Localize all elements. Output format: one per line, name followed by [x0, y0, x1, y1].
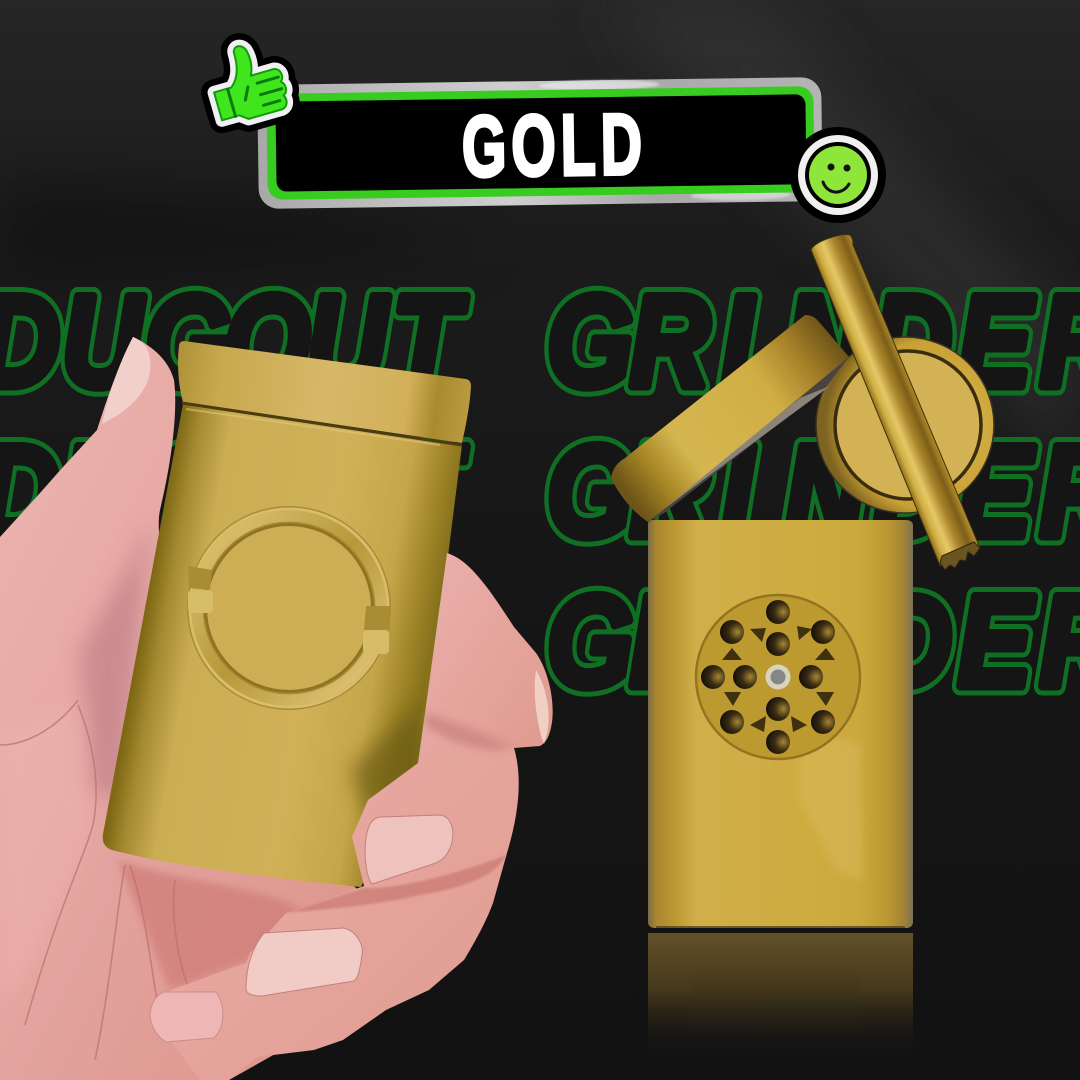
grinder teeth and holes	[696, 595, 860, 759]
nail: ring finger	[246, 928, 362, 996]
fingers over case	[150, 553, 553, 1080]
product photo: hand holding closed gold case	[0, 337, 553, 1080]
open lid	[611, 315, 849, 522]
banner title text: GOLD	[461, 97, 648, 195]
title banner	[257, 77, 823, 209]
recessed ring	[187, 506, 391, 710]
product photo: open gold grinder case	[611, 234, 994, 1058]
background word: GRINDER repeated	[547, 269, 1080, 714]
case lid	[178, 341, 471, 443]
icon: smiley	[790, 127, 886, 223]
round grinder disc	[816, 337, 994, 513]
closed case body	[103, 341, 471, 887]
nail: middle finger	[365, 815, 453, 884]
reflection	[648, 933, 913, 1058]
hand palm and thumb	[0, 337, 370, 1080]
pipe	[811, 234, 980, 570]
case body	[648, 520, 913, 928]
nail: little finger	[150, 992, 223, 1042]
background word: DUGOUT repeated	[0, 269, 468, 564]
icon: thumbs up	[204, 37, 291, 126]
